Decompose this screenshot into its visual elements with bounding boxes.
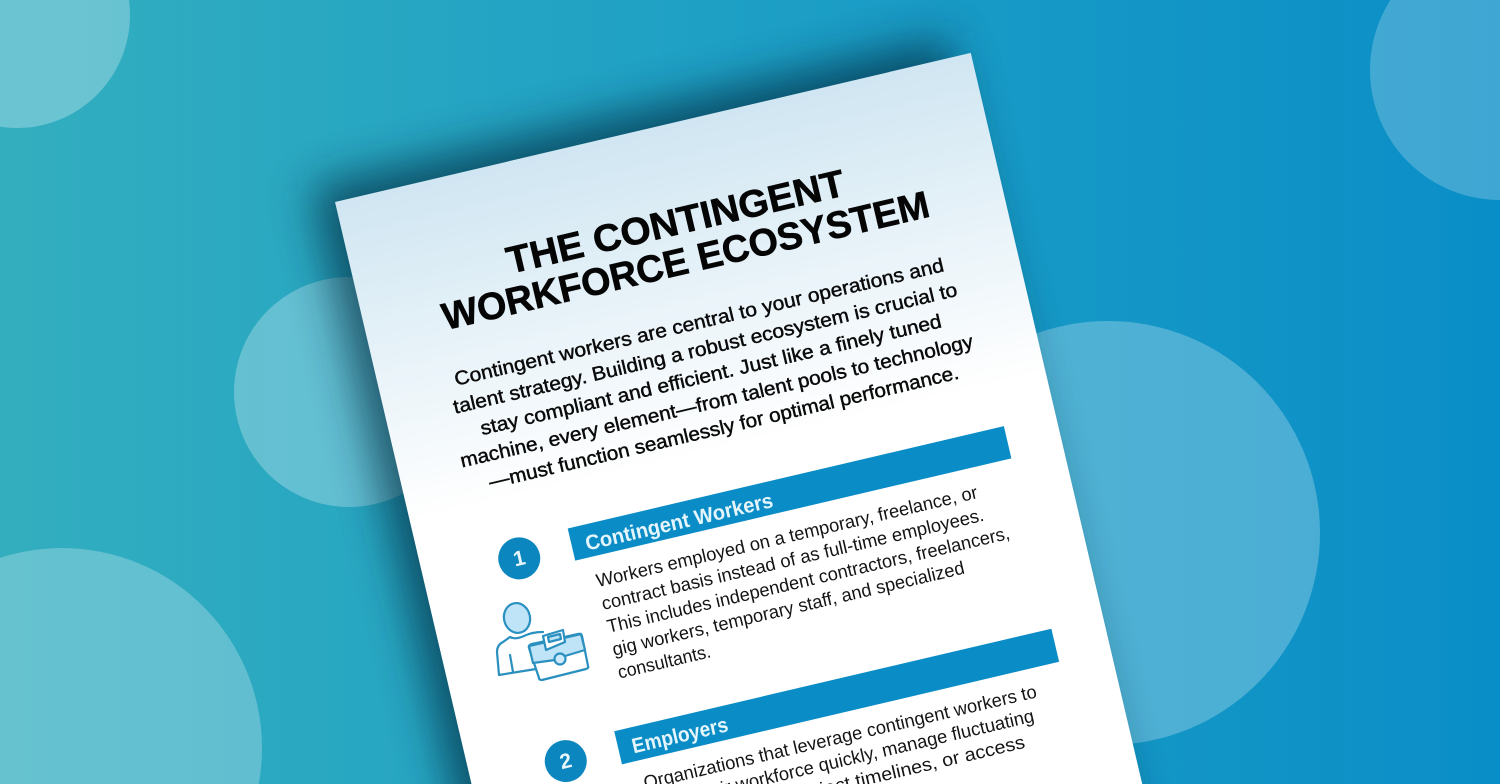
title: WORKFORCE ECOSYSTEM — [438, 184, 934, 339]
intro paragraph: stay compliant and efficient. Just like a finely tuned — [478, 311, 944, 440]
section 1 header bar: Contingent Workers — [583, 489, 775, 555]
section 1 body text: contract basis instead of as full-time employees. — [599, 504, 986, 614]
section 2 number badge: 2 — [558, 749, 574, 774]
intro paragraph: —must function seamlessly for optimal performance. — [487, 362, 961, 493]
page sheet — [335, 53, 1222, 784]
panel: tilted document page — [335, 53, 1222, 784]
section 1 body text: Workers employed on a temporary, freelance, or — [594, 481, 979, 591]
document page shadow — [311, 38, 1198, 784]
title: THE CONTINGENT — [503, 163, 849, 283]
intro paragraph — [440, 252, 982, 499]
section 1 number badge: 1 — [511, 546, 528, 571]
intro paragraph: machine, every element—from talent pools to technology — [458, 331, 975, 472]
section 1 number badge — [494, 533, 544, 584]
icon: worker with briefcase — [497, 600, 588, 680]
section 2 header bar: Employers — [630, 713, 730, 758]
section 1 body text: This includes independent contractors, freelancers, — [605, 522, 1012, 637]
section 1 body text: consultants. — [615, 640, 713, 683]
section 2 header bar — [614, 629, 1059, 764]
section 1 header bar — [568, 426, 1011, 561]
intro paragraph: talent strategy. Building a robust ecosystem is crucial to — [451, 279, 960, 419]
section 1 body text: gig workers, temporary staff, and specialized — [610, 557, 966, 660]
intro paragraph: Contingent workers are central to your operations and — [452, 255, 946, 391]
section 1 body text — [594, 476, 1022, 683]
section 2 number badge — [541, 736, 591, 784]
